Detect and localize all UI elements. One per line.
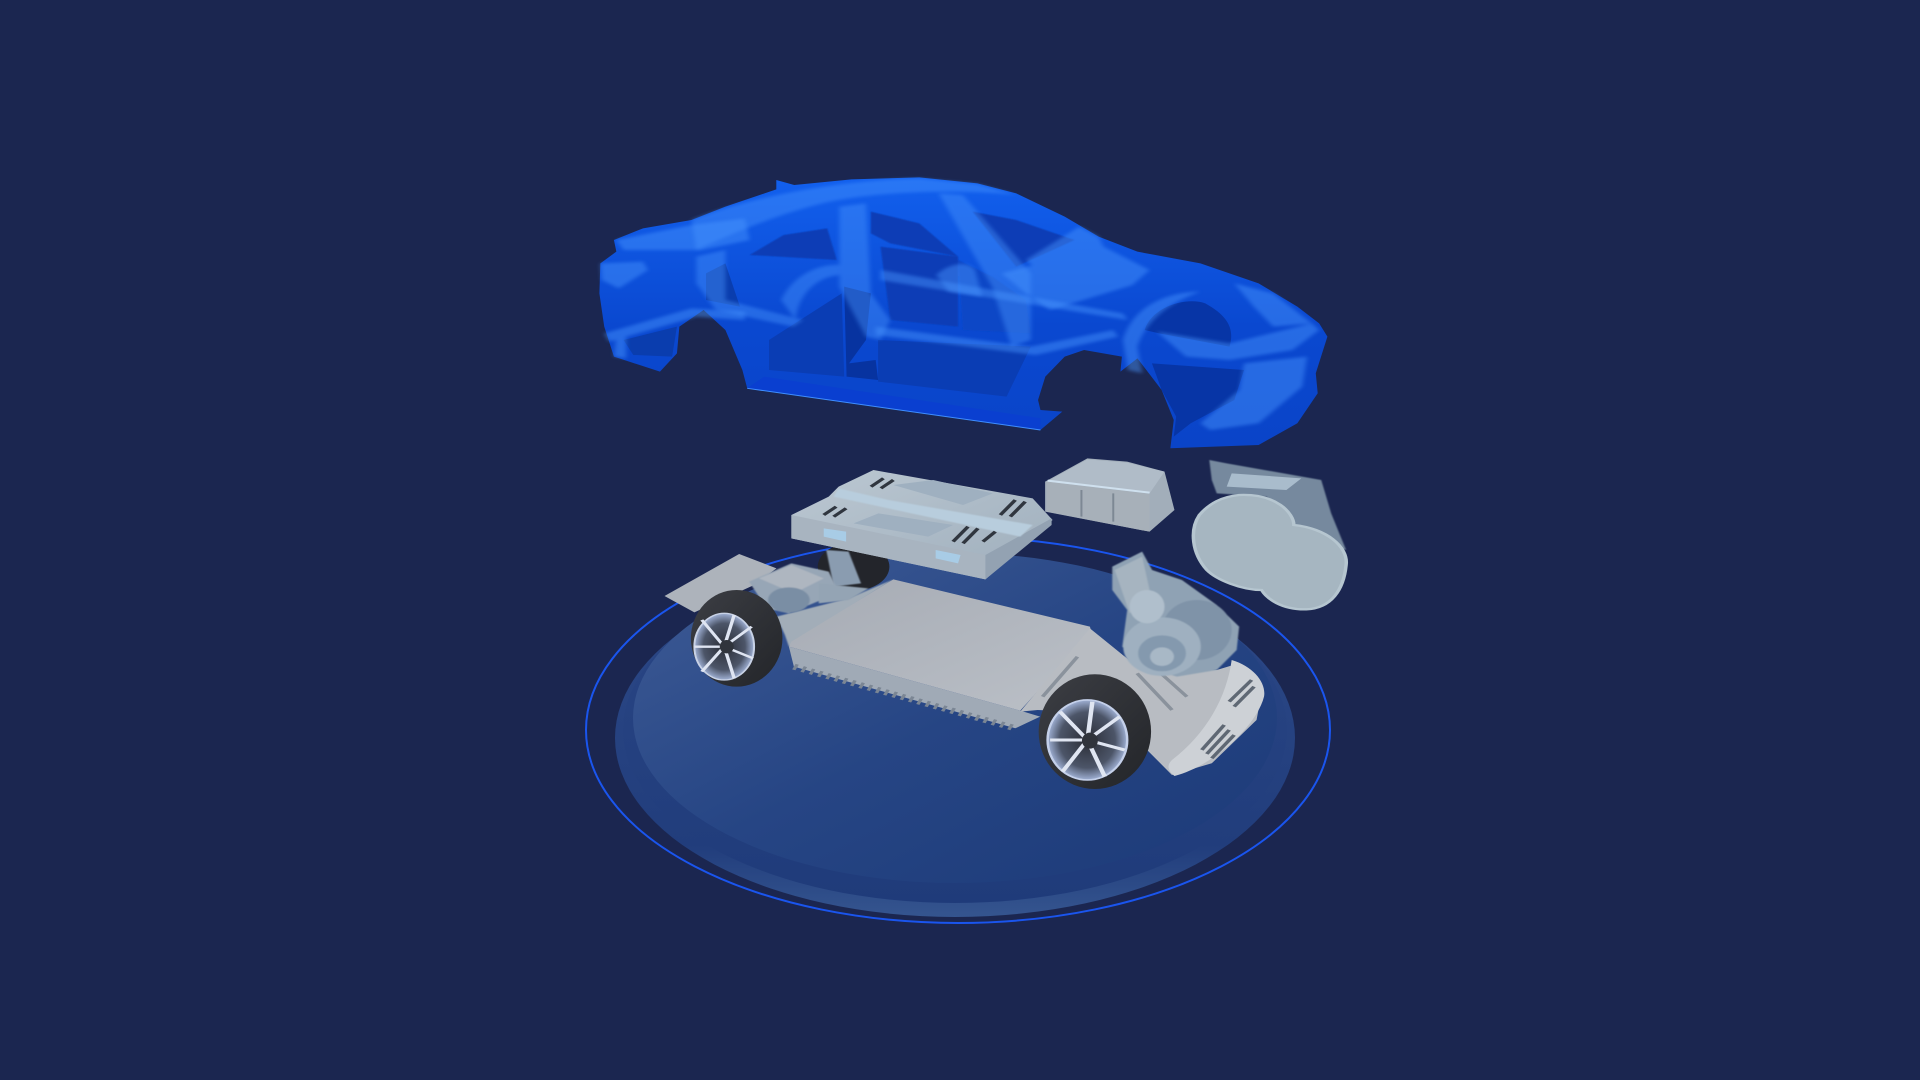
round cover bbox=[1193, 495, 1346, 609]
bracket bbox=[1209, 460, 1346, 550]
tray front wall bbox=[791, 515, 985, 579]
blue orbit ring bbox=[586, 537, 1330, 923]
car silhouette bbox=[599, 177, 1327, 448]
rear far wheel bbox=[818, 543, 889, 591]
light streaks: roof and pillars bbox=[691, 178, 1031, 347]
tray slots bbox=[824, 478, 1025, 543]
dark interior: front wheel well bbox=[1145, 301, 1244, 437]
rear frame link bbox=[776, 579, 893, 647]
tray recessed panels bbox=[854, 480, 993, 537]
front motor and gearbox bbox=[1112, 552, 1239, 677]
dark interior: windows bbox=[750, 212, 1074, 333]
dark interior: door gap bbox=[844, 287, 878, 380]
disc top face bbox=[633, 553, 1277, 883]
power electronics box bbox=[1045, 458, 1174, 532]
light streaks: dashboard and hood bbox=[936, 227, 1319, 430]
tray center channel bbox=[834, 488, 1033, 537]
front underbody shield bbox=[1169, 660, 1264, 776]
chassis assembly bbox=[665, 458, 1346, 789]
dark interior: cabin floor bbox=[769, 293, 1031, 397]
rear wheel bbox=[691, 590, 782, 687]
tray right wall bbox=[985, 518, 1052, 579]
sill bright outline bbox=[747, 388, 1040, 430]
translucent blue car body bbox=[599, 177, 1327, 448]
rear drive motor bbox=[749, 563, 868, 613]
light streaks: rear end bbox=[600, 218, 1128, 358]
disc middle tier bbox=[623, 557, 1287, 903]
disc lowest tier bbox=[615, 559, 1295, 917]
platform disc bbox=[615, 553, 1295, 917]
tray light blue windows bbox=[824, 528, 961, 563]
front subframe bbox=[1020, 628, 1262, 775]
battery ribbed side bbox=[789, 647, 1040, 728]
upper battery tray bbox=[791, 470, 1053, 579]
sill strip bbox=[747, 377, 1040, 430]
rear subframe panel bbox=[665, 554, 776, 612]
battery cooling teeth bbox=[794, 667, 1015, 728]
battery top plate bbox=[789, 579, 1091, 711]
motor cover with mounting bracket bbox=[1193, 460, 1346, 609]
front wheel bbox=[1039, 674, 1151, 789]
frame rail details bbox=[1043, 657, 1187, 710]
dark interior: rear pocket bbox=[624, 263, 740, 357]
